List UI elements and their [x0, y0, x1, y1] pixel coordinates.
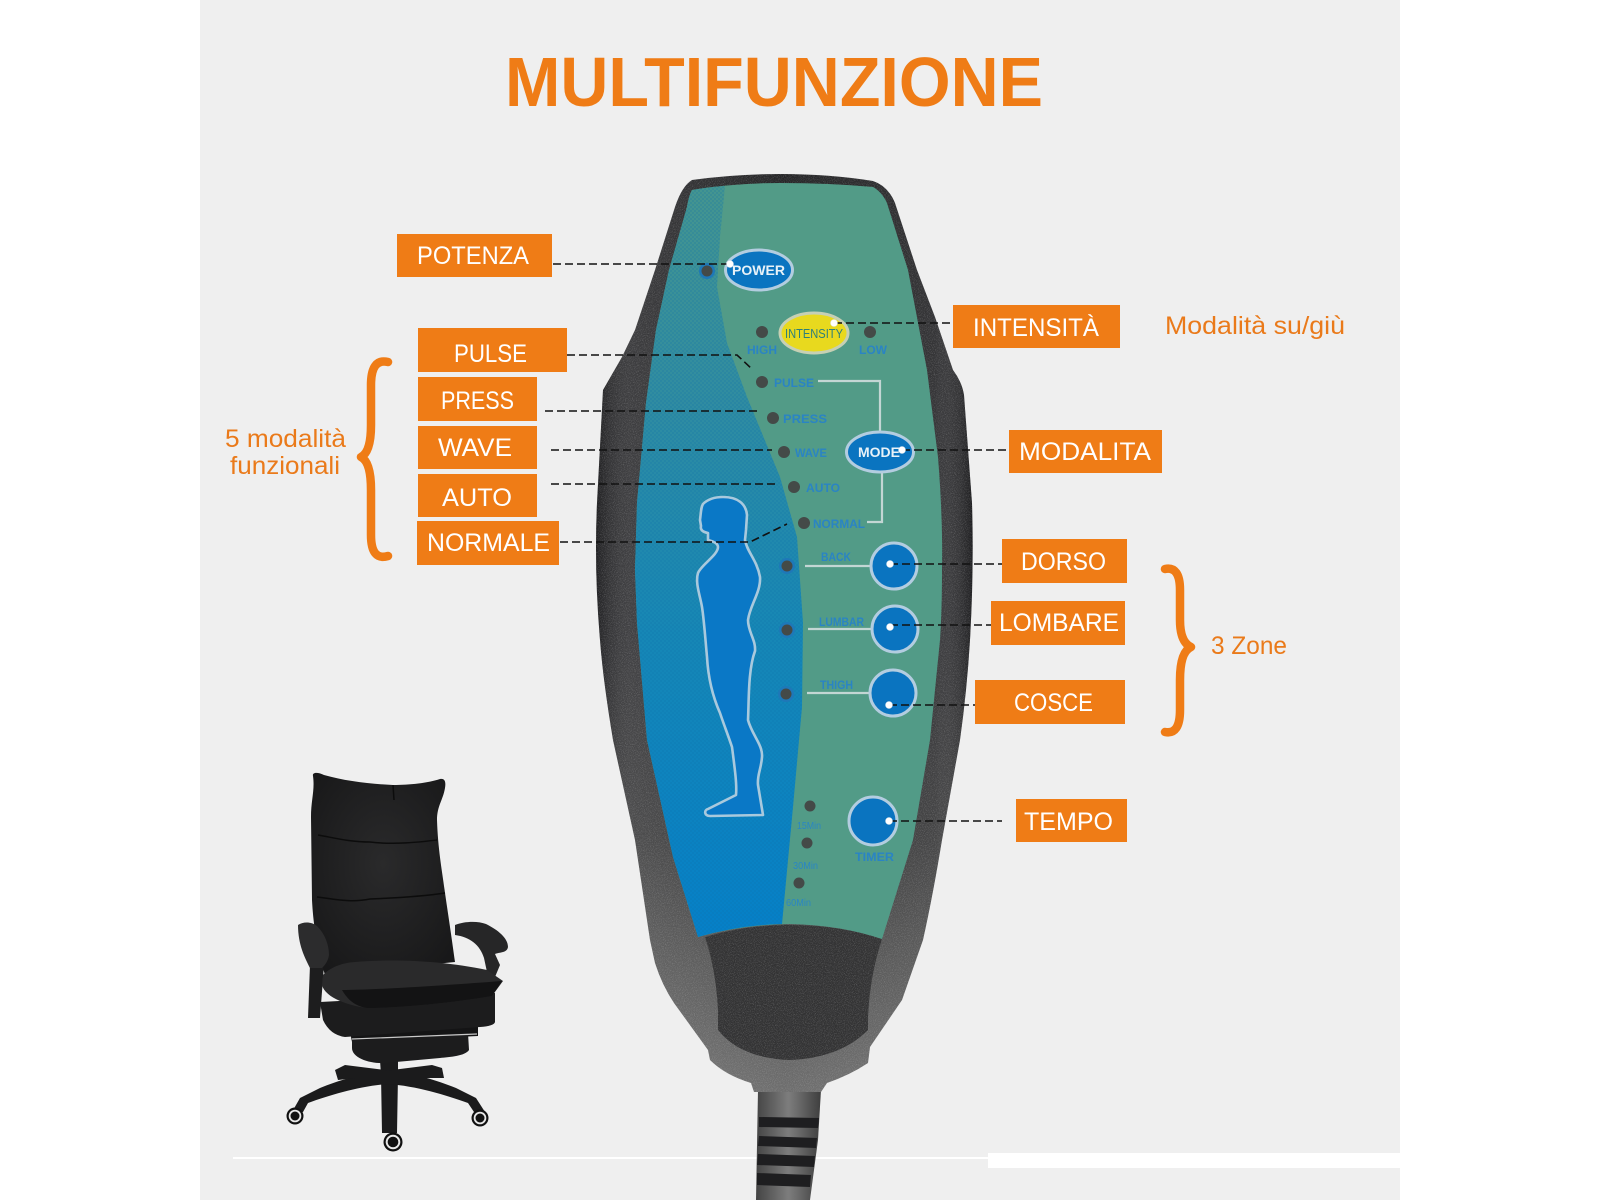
leader: PULSE: [567, 355, 753, 370]
button: lumbar: LUMBAR: [819, 615, 864, 629]
button: mode: MODE: [858, 444, 900, 460]
background panel: [200, 0, 1400, 1200]
brace: 5 modalità: [361, 361, 388, 557]
button: lumbar: [779, 606, 918, 652]
chair right arm: [455, 922, 508, 977]
leader: POTENZA: [553, 263, 730, 265]
timer indicators: 60Min: [786, 897, 811, 909]
label: PRESS: PRESS: [441, 387, 514, 415]
indicator: low: LOW: [859, 343, 888, 357]
chair footrest: [352, 1033, 469, 1063]
leader: MODALITA: [902, 449, 1009, 451]
panel face dot texture: [635, 186, 803, 937]
label: PULSE: PULSE: [454, 340, 527, 368]
leader: WAVE: [551, 449, 772, 451]
label: PULSE: [418, 328, 567, 372]
chair backrest: [311, 773, 455, 975]
bottom white strip: [988, 1153, 1400, 1168]
button: timer: [849, 797, 897, 864]
side text: 5 modalità funzionali: [225, 425, 346, 480]
label: TEMPO: TEMPO: [1024, 808, 1113, 836]
indicator: press: [767, 412, 827, 426]
button: back: BACK: [821, 550, 851, 564]
button: power: [699, 250, 792, 290]
leader: NORMALE: [560, 524, 787, 542]
chair base: [292, 1060, 485, 1133]
leader: LOMBARE: [890, 624, 991, 626]
timer indicators: 30Min: [793, 860, 818, 872]
chair wheels: [286, 1108, 488, 1152]
label: NORMALE: NORMALE: [427, 529, 550, 557]
footrest metal strip: [352, 1034, 477, 1039]
leader: AUTO: [551, 483, 775, 485]
indicator: wave: [778, 446, 827, 460]
body speckle texture: [596, 174, 973, 1092]
indicator: pulse: [756, 376, 814, 390]
chair seat cushion: [322, 961, 503, 1008]
label: AUTO: AUTO: [442, 484, 512, 512]
label: NORMALE: [417, 521, 559, 565]
remote body: [596, 174, 973, 1092]
label: DORSO: [1002, 539, 1127, 583]
label: DORSO: DORSO: [1021, 548, 1106, 576]
label: TEMPO: [1016, 799, 1127, 842]
leader: COSCE: [889, 704, 975, 706]
dark lower inset: [705, 925, 882, 1060]
label: MODALITA: MODALITA: [1019, 438, 1151, 466]
mode connector lines: [818, 381, 882, 522]
leader: DORSO: [890, 563, 1002, 565]
label: COSCE: [975, 680, 1125, 724]
button: thigh: [778, 670, 916, 716]
leader lines: [545, 264, 1009, 821]
button: power: POWER: [732, 262, 785, 278]
label: WAVE: WAVE: [438, 434, 512, 462]
button: intensity: [780, 313, 848, 353]
indicator: auto: [788, 481, 840, 495]
panel face blue area: [635, 186, 803, 937]
label: INTENSITÀ: [953, 305, 1120, 348]
chair seat base: [320, 993, 495, 1037]
label: WAVE: [418, 426, 537, 469]
label: AUTO: [418, 474, 537, 517]
button: intensity: INTENSITY: [785, 327, 844, 341]
label: POTENZA: [397, 234, 552, 277]
label: PRESS: [418, 377, 537, 421]
indicator: press: PRESS: [783, 412, 827, 426]
indicator: low: [859, 326, 888, 357]
label: MODALITA: [1009, 430, 1162, 473]
leader end dots: [726, 260, 906, 824]
label: LOMBARE: LOMBARE: [999, 609, 1119, 637]
title: MULTIFUNZIONE: [505, 43, 1043, 121]
label: POTENZA: POTENZA: [417, 242, 529, 270]
seat cushion shadow: [342, 981, 502, 1008]
label: INTENSITÀ: INTENSITÀ: [973, 313, 1099, 342]
indicator: auto: AUTO: [806, 481, 840, 495]
human silhouette icon: [697, 497, 763, 816]
indicator: normal: NORMAL: [813, 517, 865, 531]
panel face green: [635, 183, 942, 939]
chair left arm: [298, 922, 329, 968]
button: thigh: THIGH: [820, 678, 853, 692]
button: timer: TIMER: [855, 850, 894, 864]
remote control: [596, 174, 973, 1200]
leader: PRESS: [545, 410, 759, 412]
bottom white line: [233, 1157, 988, 1159]
brace: 3 zone: [1165, 569, 1191, 732]
leader: INTENSITÀ: [834, 322, 953, 324]
cord: [756, 1090, 821, 1200]
indicator: high: HIGH: [747, 343, 777, 357]
side text: 3 Zone: 3 Zone: [1211, 632, 1287, 660]
label: COSCE: COSCE: [1014, 689, 1093, 717]
side text: Modalità su/giù: Modalità su/giù: [1165, 312, 1345, 340]
office chair: [286, 773, 508, 1152]
button: mode: [846, 432, 914, 472]
button: back: [779, 543, 917, 589]
side text: 5 modalità funzionali: 5 modalità: [225, 425, 346, 453]
indicator: high: [747, 326, 777, 357]
indicator: wave: WAVE: [795, 446, 827, 460]
backrest seams: [317, 785, 445, 901]
label: LOMBARE: [991, 601, 1125, 645]
chair left arm support: [308, 965, 324, 1018]
leader: TEMPO: [889, 820, 1002, 822]
chair under-seat frame: [350, 1024, 478, 1042]
timer indicators: [786, 800, 821, 909]
side text: 5 modalità funzionali: funzionali: [230, 452, 340, 480]
indicator: pulse: PULSE: [774, 376, 814, 390]
timer indicators: 15Min: [797, 820, 821, 832]
